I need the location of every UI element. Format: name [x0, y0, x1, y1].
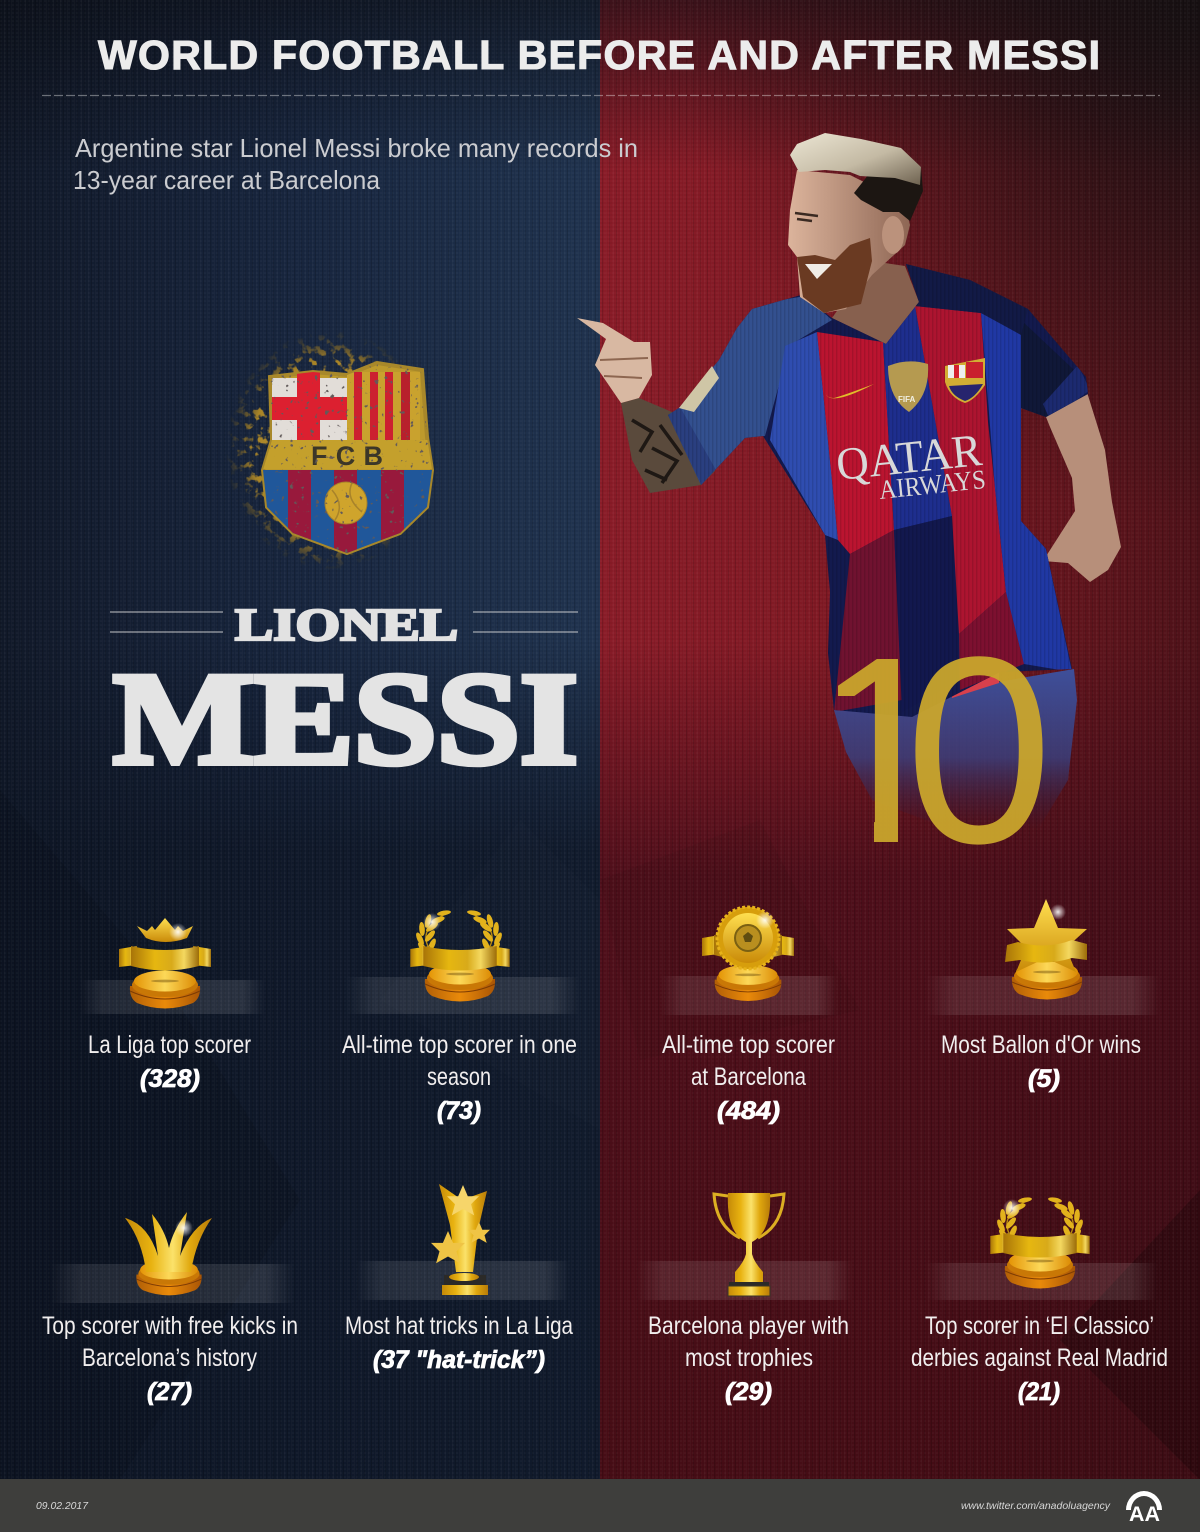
achievement: La Liga top scorer: (328): [140, 1065, 200, 1093]
sponsor and badges on the shirt: [679, 358, 987, 505]
icon: FC Barcelona crest with gold splatter: FCB: [311, 441, 383, 471]
footer bar: [0, 1479, 1200, 1532]
player illustration: Messi pointing in Barcelona kit: [577, 133, 1121, 830]
achievement: top scorer with free kicks: (27): [147, 1378, 192, 1406]
heading: Lionel Messi: MESSI: [113, 645, 578, 792]
date: 09.02.2017: [36, 1501, 88, 1512]
icon: Anadolu Agency logo: [1126, 1491, 1162, 1526]
icon: FC Barcelona crest with gold splatter: [226, 330, 434, 570]
player shorts: [834, 669, 1077, 830]
achievement: most Ballon d'Or wins: Most Ballon d'Or wins: [941, 1031, 1141, 1059]
achievement: all-time top scorer at Barcelona: [660, 907, 838, 1125]
achievement: most hat tricks in La Liga: Most hat tricks in La Liga: [345, 1312, 573, 1340]
achievement: Barcelona player with most trophies: most trophies: [685, 1344, 813, 1372]
intro text: [73, 133, 638, 195]
intro text: Argentine star Lionel Messi broke many records in: [75, 133, 638, 163]
achievement: top scorer with free kicks: Barcelona’s history: [82, 1344, 257, 1372]
achievement: Barcelona player with most trophies: [636, 1193, 853, 1406]
icon: crown award: [80, 918, 265, 1014]
achievement: all-time top scorer in one season: season: [427, 1063, 491, 1091]
achievement: top scorer in El Classico: [911, 1196, 1168, 1406]
achievement: most hat tricks in La Liga: (37 "hat-trick”): [373, 1346, 545, 1374]
sponsor and badges on the shirt: QATAR: [834, 424, 985, 490]
achievement: all-time top scorer at Barcelona: at Barcelona: [691, 1063, 806, 1091]
sponsor and badges on the shirt: FIFA: [898, 395, 916, 404]
achievement: Barcelona player with most trophies: (29): [725, 1378, 772, 1406]
source url: www.twitter.com/anadoluagency: [961, 1500, 1111, 1512]
achievement: all-time top scorer at Barcelona: (484): [717, 1097, 780, 1125]
icon: Anadolu Agency logo: AA: [1129, 1503, 1160, 1526]
heading: Lionel Messi: [110, 599, 578, 792]
icon: star trophy: [355, 1184, 570, 1300]
icon: gold cup: [636, 1193, 853, 1300]
achievement: all-time top scorer in one season: (73): [437, 1097, 481, 1125]
achievement: top scorer in El Classico: (21): [1018, 1378, 1060, 1406]
icon: football medal: [660, 907, 838, 1015]
player jersey: [660, 260, 1090, 720]
icon: laurel award: [345, 909, 580, 1014]
achievement: most Ballon d'Or wins: (5): [1028, 1065, 1060, 1093]
big number 10: 1: [808, 602, 956, 899]
sponsor and badges on the shirt: AIRWAYS: [877, 464, 987, 505]
achievement: all-time top scorer in one season: [342, 909, 580, 1125]
player right arm: [1043, 389, 1121, 582]
achievement: top scorer with free kicks: [42, 1212, 298, 1406]
title: WORLD FOOTBALL BEFORE AND AFTER MESSI: [98, 32, 1100, 78]
player head: [788, 133, 923, 313]
big number 10: [838, 656, 1043, 845]
icon: open crown award: [50, 1212, 295, 1303]
achievement: all-time top scorer in one season: All-time top scorer in one: [342, 1031, 577, 1059]
achievement: top scorer with free kicks: Top scorer with free kicks in: [42, 1312, 298, 1340]
icon: laurel award: [925, 1196, 1158, 1300]
tattooed forearm and pointing hand: [577, 318, 715, 493]
big number 10: 0: [905, 602, 1053, 899]
achievement: most Ballon d'Or wins: [925, 899, 1160, 1093]
icon: gold star award: [925, 899, 1160, 1015]
intro text: 13-year career at Barcelona: [73, 165, 381, 195]
heading: Lionel Messi: LIONEL: [235, 599, 458, 650]
achievement: Barcelona player with most trophies: Barcelona player with: [648, 1312, 849, 1340]
achievement: most hat tricks in La Liga: [345, 1184, 573, 1374]
achievement: all-time top scorer at Barcelona: All-time top scorer: [662, 1031, 835, 1059]
achievement: La Liga top scorer: [80, 918, 265, 1093]
achievement: La Liga top scorer: La Liga top scorer: [88, 1031, 251, 1059]
player neck: [832, 261, 919, 344]
